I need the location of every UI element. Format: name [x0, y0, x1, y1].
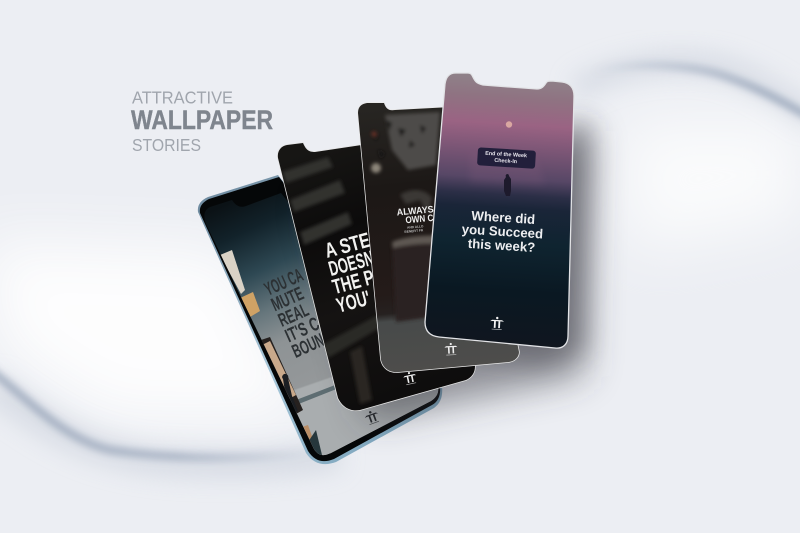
- question text: you Succeed: [461, 222, 543, 241]
- title: STORIES: [132, 135, 201, 155]
- icon: card 4 logo: [490, 316, 504, 330]
- icon: phone logo: [365, 411, 379, 425]
- card 2 text: YOU': [334, 287, 373, 318]
- card 3 text: BENEFIT FR: [404, 228, 424, 234]
- card 3 text: [397, 206, 434, 233]
- shadow: cards: [310, 120, 590, 420]
- horizon glow: [470, 150, 545, 185]
- card 3 text: AND ALLO: [407, 224, 424, 230]
- moon: [506, 121, 512, 128]
- phone wallpaper text: IT'S C: [282, 314, 323, 347]
- swoosh: bottom left: [0, 362, 340, 464]
- card 2 text: A STE: [322, 229, 373, 263]
- title: [131, 88, 273, 155]
- icon: card 3 logo: [444, 343, 458, 356]
- card 3 text: ALWAYS: [396, 204, 434, 218]
- card 2: staircase: [277, 142, 476, 412]
- card 2 text: [327, 232, 372, 312]
- question text: this week?: [467, 236, 536, 255]
- phone wallpaper text: BOUN: [289, 330, 328, 363]
- question text: [461, 208, 544, 255]
- title: ATTRACTIVE: [132, 88, 233, 108]
- question text: Where did: [471, 208, 536, 227]
- label pill: Check-In: [494, 158, 517, 165]
- phone frame: [198, 175, 442, 464]
- phone wallpaper text: [263, 269, 324, 358]
- card 3 text: OWN C: [405, 213, 434, 226]
- phone: [198, 175, 442, 464]
- card 2 text: DOESN: [326, 247, 377, 281]
- card 3: coffee cup: [358, 102, 520, 373]
- phone wallpaper text: REAL: [275, 300, 312, 332]
- swoosh: top right: [575, 63, 800, 120]
- silhouette: [504, 174, 511, 196]
- card 2 text: THE P: [330, 266, 377, 299]
- icon: card 2 logo: [403, 372, 416, 386]
- phone wallpaper text: YOU CA: [261, 265, 307, 301]
- phone screen: [204, 193, 438, 456]
- phone wallpaper text: MUTE: [268, 283, 307, 316]
- card 4: end of the week check-in: [425, 73, 574, 348]
- label pill: End of the Week: [485, 151, 527, 159]
- label pill: [477, 147, 536, 169]
- title: WALLPAPER: [131, 105, 273, 135]
